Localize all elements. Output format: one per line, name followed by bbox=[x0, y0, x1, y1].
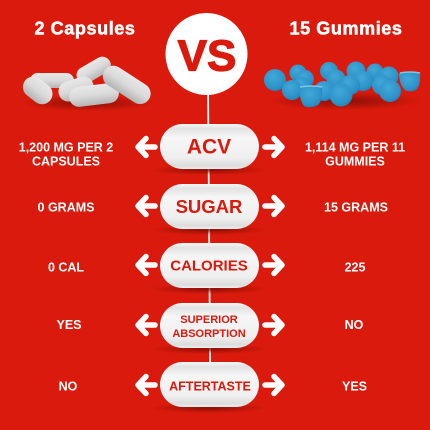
VS badge bbox=[166, 13, 248, 95]
right value: GUMMIES bbox=[325, 154, 385, 168]
right arrow bbox=[265, 316, 282, 334]
right arrow bbox=[265, 376, 282, 394]
right value: 15 GRAMS bbox=[324, 201, 388, 215]
right value: 1,114 MG PER 11 bbox=[305, 141, 405, 155]
left value: 1,200 MG PER 2 bbox=[19, 141, 113, 155]
heading: 15 Gummies: 15 Gummies bbox=[289, 18, 403, 38]
pill: SUGAR bbox=[176, 196, 242, 217]
pill bbox=[151, 184, 267, 235]
left arrow bbox=[138, 198, 155, 214]
pill bbox=[151, 124, 267, 175]
pill: CALORIES bbox=[170, 258, 248, 274]
VS badge: VS bbox=[178, 32, 236, 80]
row: Aftertaste bbox=[59, 362, 367, 413]
right arrow bbox=[265, 198, 282, 214]
pill bbox=[151, 362, 267, 413]
left arrow bbox=[138, 316, 155, 334]
row: Calories bbox=[48, 243, 365, 294]
left value: 0 GRAMS bbox=[38, 201, 94, 215]
row: Superior Absorption bbox=[56, 303, 364, 354]
left value: 0 CAL bbox=[48, 261, 84, 275]
right arrow bbox=[265, 256, 282, 274]
left arrow bbox=[138, 376, 155, 394]
heading: 2 Capsules: 2 Capsules bbox=[34, 18, 136, 38]
right value: 225 bbox=[345, 261, 365, 275]
pill: SUPERIOR bbox=[180, 314, 238, 326]
image: blue gummies bbox=[264, 62, 421, 110]
row: Sugar bbox=[38, 184, 388, 235]
pill bbox=[151, 303, 267, 354]
left value: NO bbox=[59, 380, 78, 394]
pill: AFTERTASTE bbox=[169, 380, 251, 394]
left value: CAPSULES bbox=[32, 154, 100, 168]
pill: ABSORPTION bbox=[172, 328, 246, 340]
right value: YES bbox=[342, 380, 367, 394]
image: white capsules bbox=[19, 54, 155, 111]
pill: ACV bbox=[187, 136, 231, 158]
pill bbox=[151, 243, 267, 294]
connector line bbox=[207, 94, 211, 364]
left value: YES bbox=[56, 318, 82, 332]
right value: NO bbox=[345, 318, 364, 332]
right arrow bbox=[265, 138, 282, 156]
row: ACV bbox=[19, 124, 405, 175]
left arrow bbox=[138, 138, 155, 156]
left arrow bbox=[138, 256, 155, 274]
